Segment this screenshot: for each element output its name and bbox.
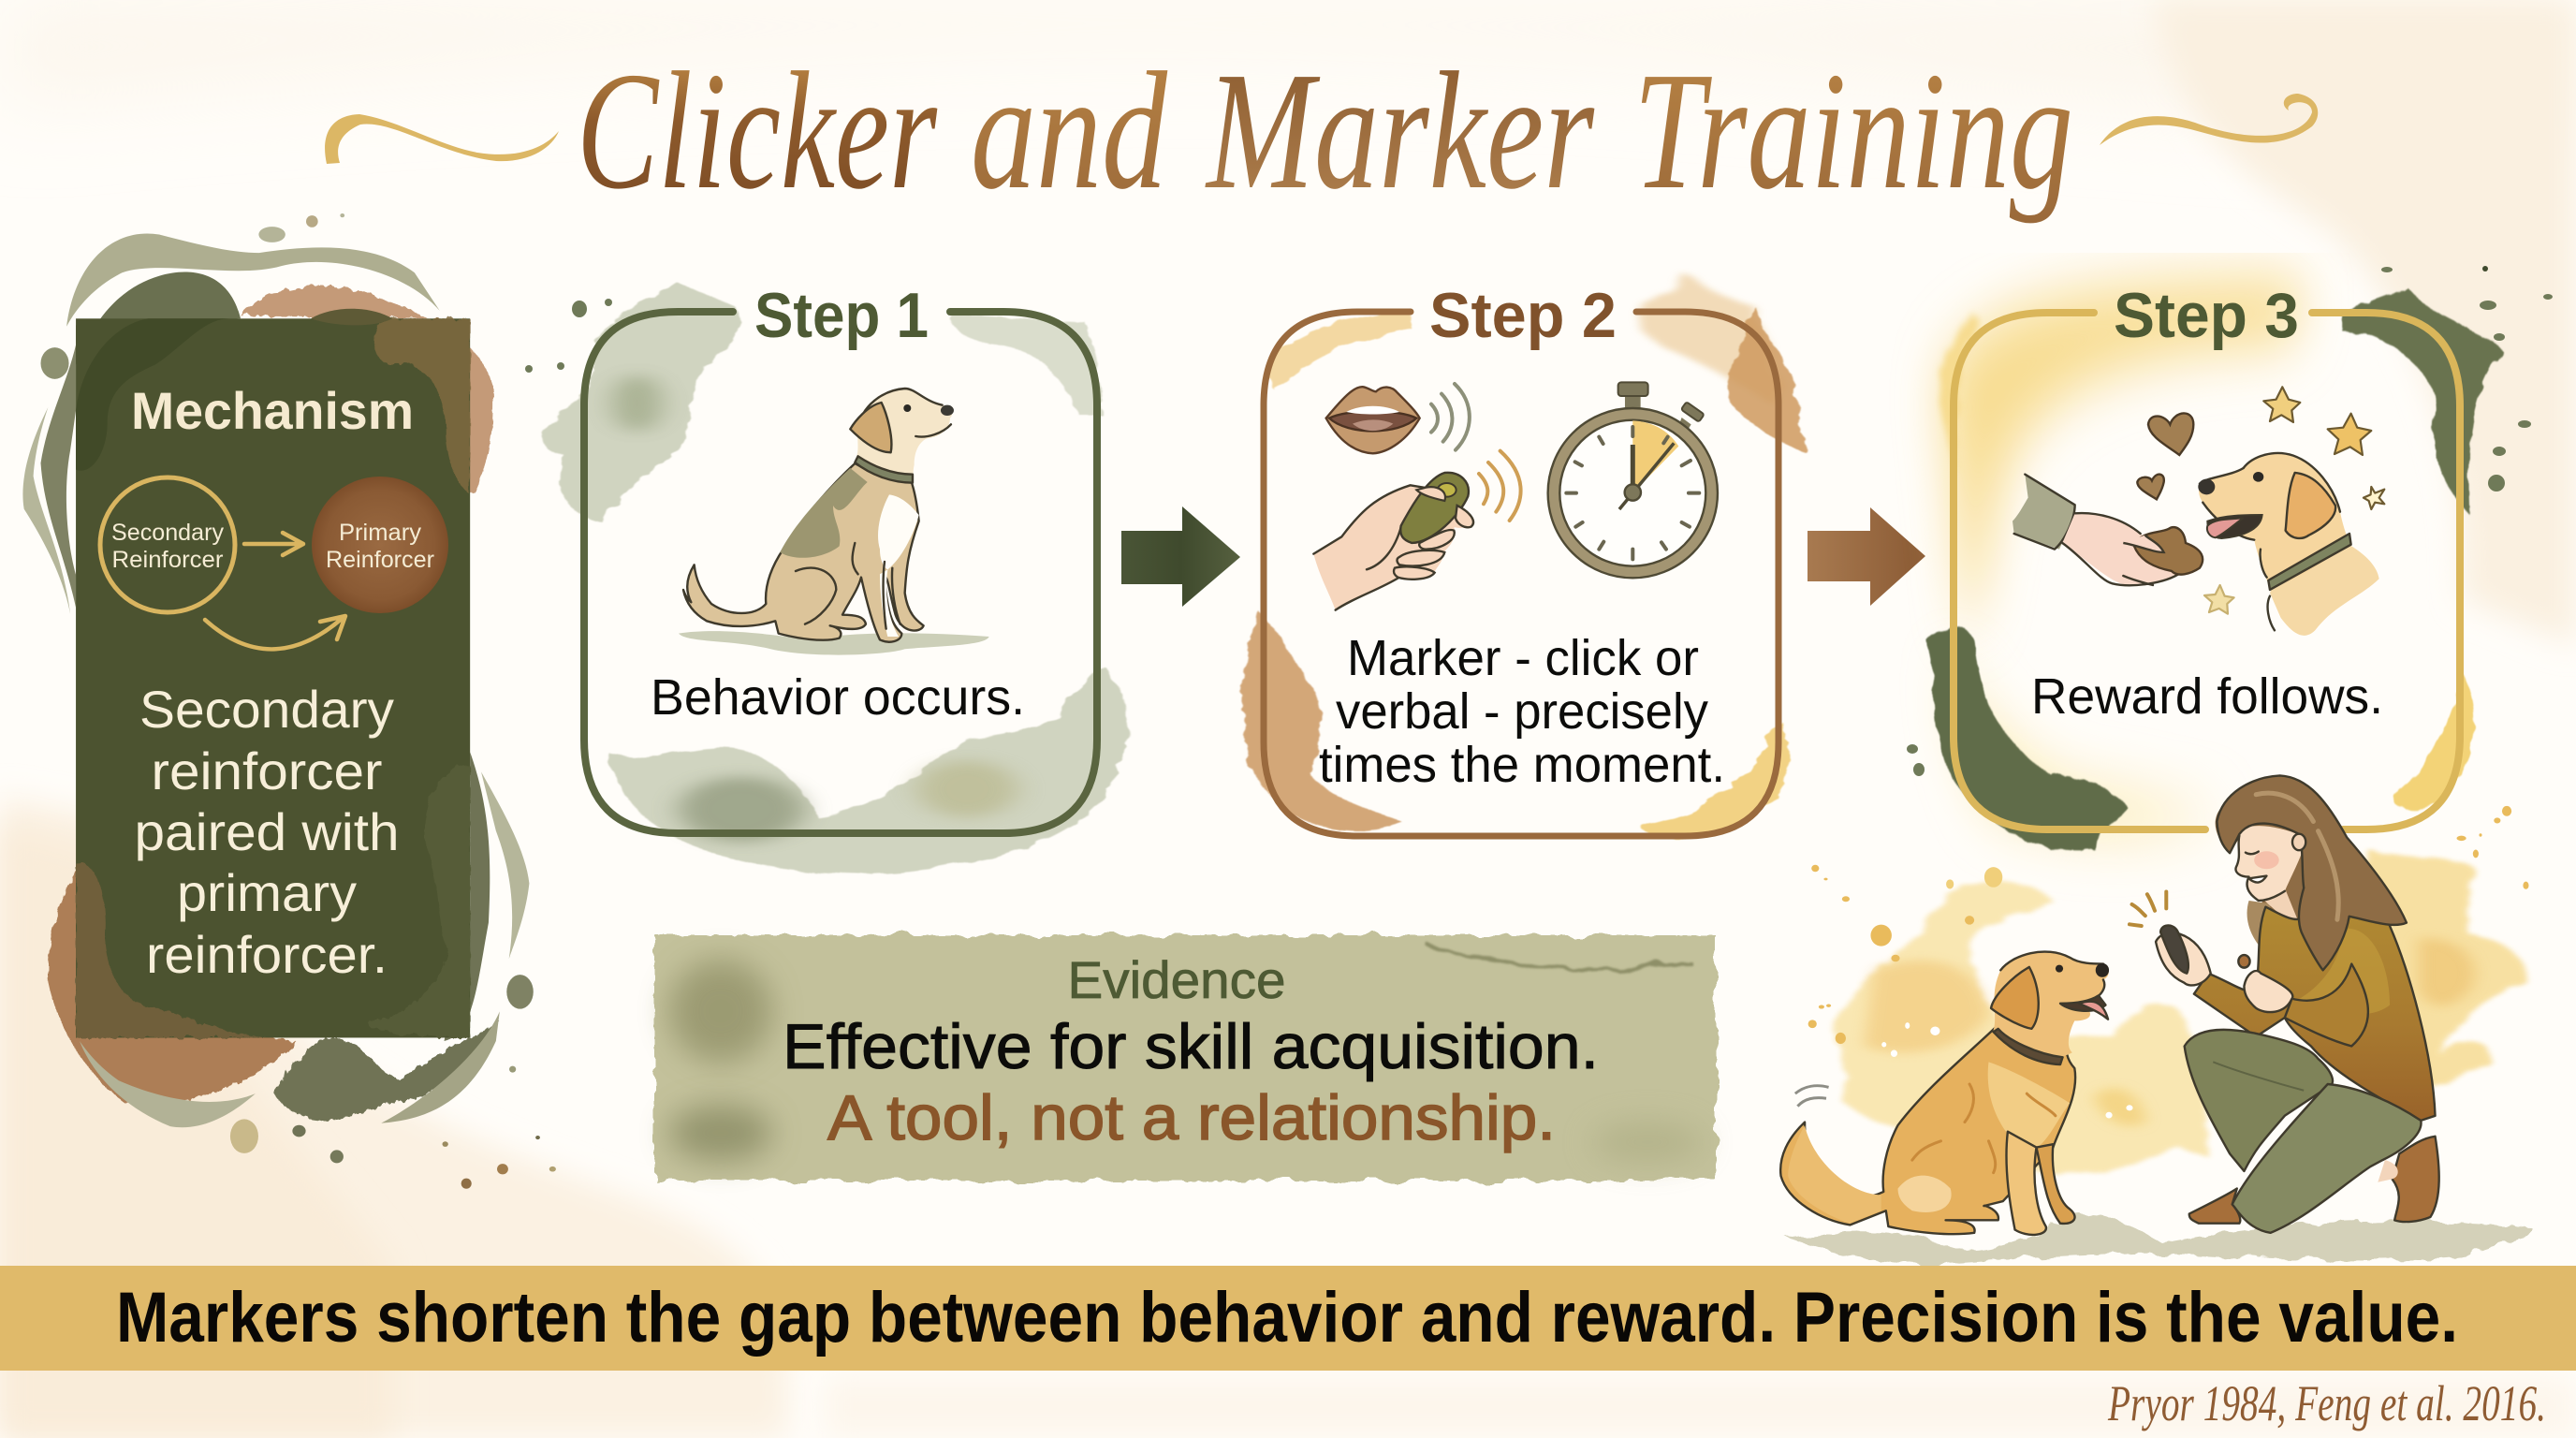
hair front (2217, 775, 2407, 970)
secondary reinforcer circle: Reinforcer (112, 547, 223, 573)
evidence statement: Effective for skill acquisition. (783, 1011, 1599, 1082)
text: marker description (1319, 630, 1725, 793)
panel: step 1 (525, 280, 1128, 874)
ground shadow (1786, 1213, 2534, 1264)
icon: stars (2204, 387, 2384, 614)
sweater (2194, 905, 2436, 1121)
title flourish right (2100, 94, 2318, 145)
icon: sitting dog (679, 389, 989, 655)
mechanism body text: Secondary (139, 680, 394, 739)
evidence label: Evidence (1067, 950, 1286, 1009)
title: and (971, 37, 1168, 224)
text: behavior occurs: Behavior occurs. (651, 669, 1025, 726)
arrow: brown (1808, 507, 1925, 606)
mechanism body text: reinforcer (152, 741, 382, 800)
frame: step 3 (1954, 313, 2460, 829)
takeaway band (0, 1266, 2576, 1371)
title (577, 37, 2073, 224)
washes: step 1 (540, 284, 1128, 874)
washes: step 2 (1242, 273, 1803, 839)
panel: step 3 (1907, 266, 2553, 850)
evidence caveat: A tool, not a relationship. (827, 1082, 1556, 1153)
title: Marker (1205, 37, 1595, 224)
frame: step 2 (1264, 312, 1778, 836)
primary reinforcer circle: Reinforcer (326, 547, 434, 573)
sleeve and hands (2285, 964, 2368, 1046)
heading: step 2: Step 2 (1429, 280, 1617, 351)
text: marker description: times the moment. (1319, 737, 1725, 793)
golden retriever (1780, 952, 2109, 1235)
mechanism body text: reinforcer. (146, 925, 388, 984)
mechanism body text: primary (177, 863, 357, 922)
panel: mechanism (22, 213, 556, 1189)
face (2236, 826, 2304, 901)
title: Training (1633, 37, 2073, 224)
arrow: green (1121, 506, 1240, 607)
icon: hand with clicker (1313, 451, 1521, 610)
illustration: trainer and dog (1780, 775, 2534, 1264)
evidence banner (654, 935, 1716, 1181)
heading: mechanism: Mechanism (131, 381, 414, 440)
frame: step 1 (584, 312, 1097, 833)
icon: happy dog head (2198, 453, 2379, 636)
shoes (2189, 1189, 2240, 1224)
title flourish left (325, 114, 559, 164)
arrow: curved (205, 616, 345, 649)
secondary reinforcer circle: Secondary (111, 520, 224, 546)
droplets: step 3 (1907, 266, 2553, 776)
mechanism body text (135, 680, 399, 984)
mechanism body text: paired with (135, 802, 399, 861)
text: marker description: verbal - precisely (1336, 683, 1708, 740)
trainer (2130, 775, 2439, 1233)
heading: step 3: Step 3 (2114, 280, 2299, 351)
hair back (2216, 775, 2407, 925)
text: reward follows: Reward follows. (2031, 668, 2383, 725)
pants (2185, 1030, 2333, 1171)
panel: step 2 (1242, 273, 1803, 839)
icon: lips and sound waves (1326, 384, 1470, 453)
icon: hand offering treat (2012, 475, 2203, 586)
arrow: straight (244, 533, 303, 555)
heading: step 1: Step 1 (754, 280, 929, 351)
primary reinforcer circle (312, 477, 448, 613)
secondary reinforcer circle (100, 477, 235, 612)
washes: step 3 (1925, 279, 2503, 850)
gold splash (1808, 806, 2529, 1175)
icon: stopwatch (1548, 382, 1718, 578)
icon: hearts (2137, 413, 2193, 499)
droplets: step 1 (525, 299, 612, 373)
title: Clicker (577, 37, 938, 224)
primary reinforcer circle: Primary (339, 520, 422, 546)
text: marker description: Marker - click or (1347, 630, 1699, 686)
